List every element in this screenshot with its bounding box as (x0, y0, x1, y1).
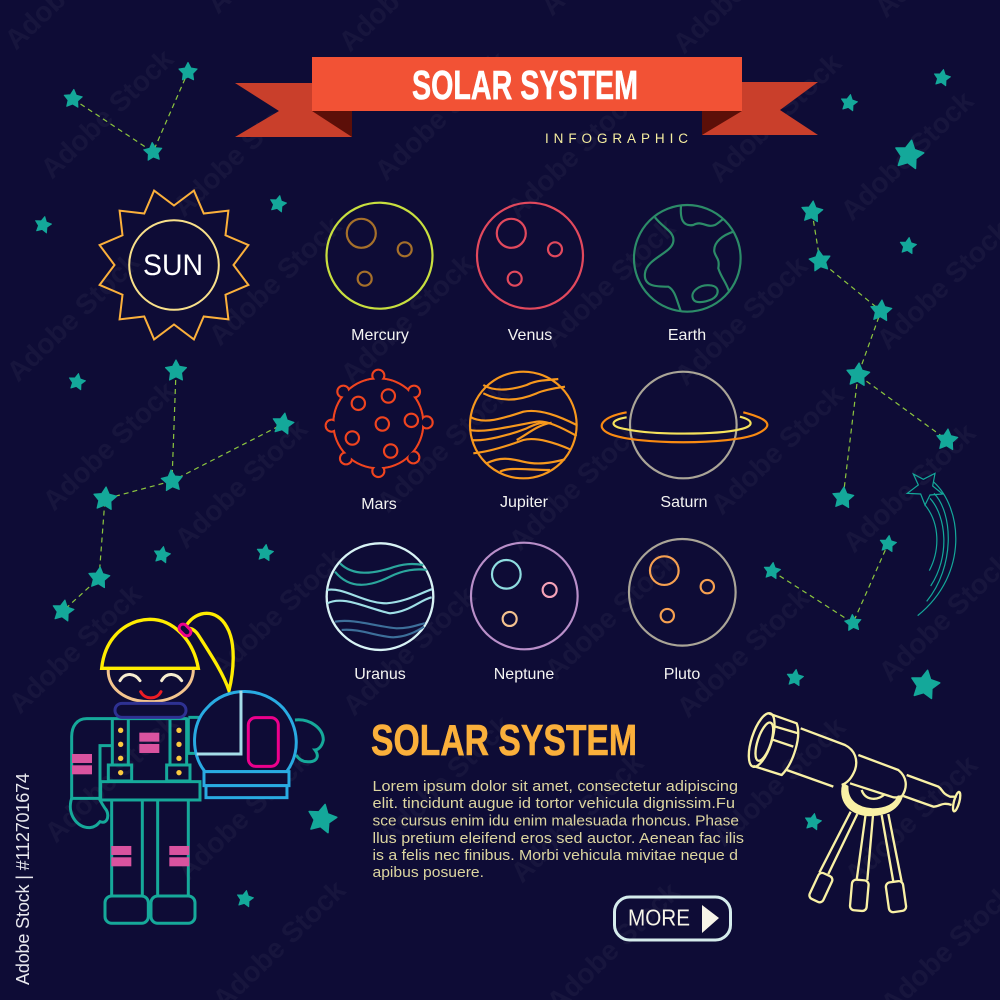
astronaut (70, 613, 323, 923)
stock credit: Adobe Stock | #112701674 (13, 773, 33, 985)
title: SOLAR SYSTEM (412, 62, 638, 108)
label: Mars: Mars (361, 496, 397, 513)
label: Venus: Venus (508, 327, 552, 344)
planet: Mercury (326, 203, 432, 309)
label: Earth: Earth (668, 327, 706, 344)
label: Pluto: Pluto (664, 666, 700, 683)
text: Adobe Stock (371, 377, 516, 518)
face (108, 668, 193, 702)
text: Adobe Stock (203, 210, 348, 351)
suit buttons (118, 728, 182, 775)
text: Adobe Stock (1, 246, 146, 387)
text: Adobe Stock (167, 81, 312, 222)
planet: Jupiter (470, 372, 577, 478)
text: Adobe Stock (671, 582, 816, 723)
body text: sce cursus enim idu enim malesuada rhoncus. Phase (372, 814, 739, 830)
body text: llus pretium eleifend eros sed auctor. Aenean fac ilis (372, 831, 744, 847)
planet: Venus (477, 203, 583, 309)
planet: Pluto (629, 539, 736, 646)
text: Adobe Stock (539, 544, 684, 685)
text: Adobe Stock (505, 747, 650, 888)
text: Adobe Stock (373, 709, 518, 850)
text: Adobe Stock (501, 83, 646, 224)
text: Adobe Stock (37, 375, 182, 516)
text: Adobe Stock (705, 379, 850, 520)
text: Adobe Stock (537, 212, 682, 353)
planet: Uranus (327, 543, 433, 650)
text: Adobe Stock (35, 43, 180, 184)
text: Adobe Stock (39, 707, 184, 848)
label: Neptune: Neptune (494, 666, 554, 683)
planet: Neptune (471, 543, 578, 649)
suit patches (72, 733, 189, 866)
label: Mercury: Mercury (351, 327, 409, 344)
text: Adobe Stock (169, 413, 314, 554)
heading: SOLAR SYSTEM (371, 716, 637, 765)
stars (34, 62, 958, 907)
text: Adobe Stock (837, 417, 982, 558)
body text (372, 779, 744, 881)
hair (102, 613, 233, 691)
telescope (744, 710, 962, 913)
planet: Earth (634, 205, 741, 312)
more button (614, 897, 730, 940)
text: Adobe Stock (703, 47, 848, 188)
planet: Mars (326, 370, 433, 477)
sun: SUN (143, 249, 203, 282)
text: Adobe Stock (369, 45, 514, 186)
constellation lines (63, 72, 947, 623)
text: Adobe Stock (835, 85, 980, 226)
text: Adobe Stock (3, 578, 148, 719)
helmet (195, 691, 296, 798)
text: Adobe Stock (669, 250, 814, 391)
text: Adobe Stock (337, 580, 482, 721)
body text: is a felis nec finibus. Morbi vehicula mivitae neque d (372, 848, 738, 864)
body text: elit. tincidunt augue id tortor vehicula dignissim.Fu (372, 796, 735, 812)
text: Adobe Stock (205, 542, 350, 683)
subtitle: INFOGRAPHIC (545, 131, 688, 146)
shooting star (907, 473, 956, 616)
text: Adobe Stock (707, 711, 852, 852)
text: Adobe Stock (335, 248, 480, 389)
text: Adobe Stock (839, 749, 984, 890)
planet: Saturn (602, 372, 767, 478)
hair tie (177, 622, 193, 638)
text: Adobe Stock (503, 415, 648, 556)
text: Adobe Stock (171, 745, 316, 886)
label: Uranus: Uranus (354, 666, 406, 683)
title ribbon (235, 57, 818, 137)
astronaut suit (70, 717, 323, 923)
label: Jupiter: Jupiter (500, 494, 549, 511)
body text: apibus posuere. (372, 865, 484, 881)
body text: Lorem ipsum dolor sit amet, consectetur adipiscing (372, 779, 738, 795)
sun (100, 191, 248, 339)
label: Saturn: Saturn (660, 494, 708, 511)
collar (115, 703, 186, 717)
more button: MORE (628, 904, 690, 930)
